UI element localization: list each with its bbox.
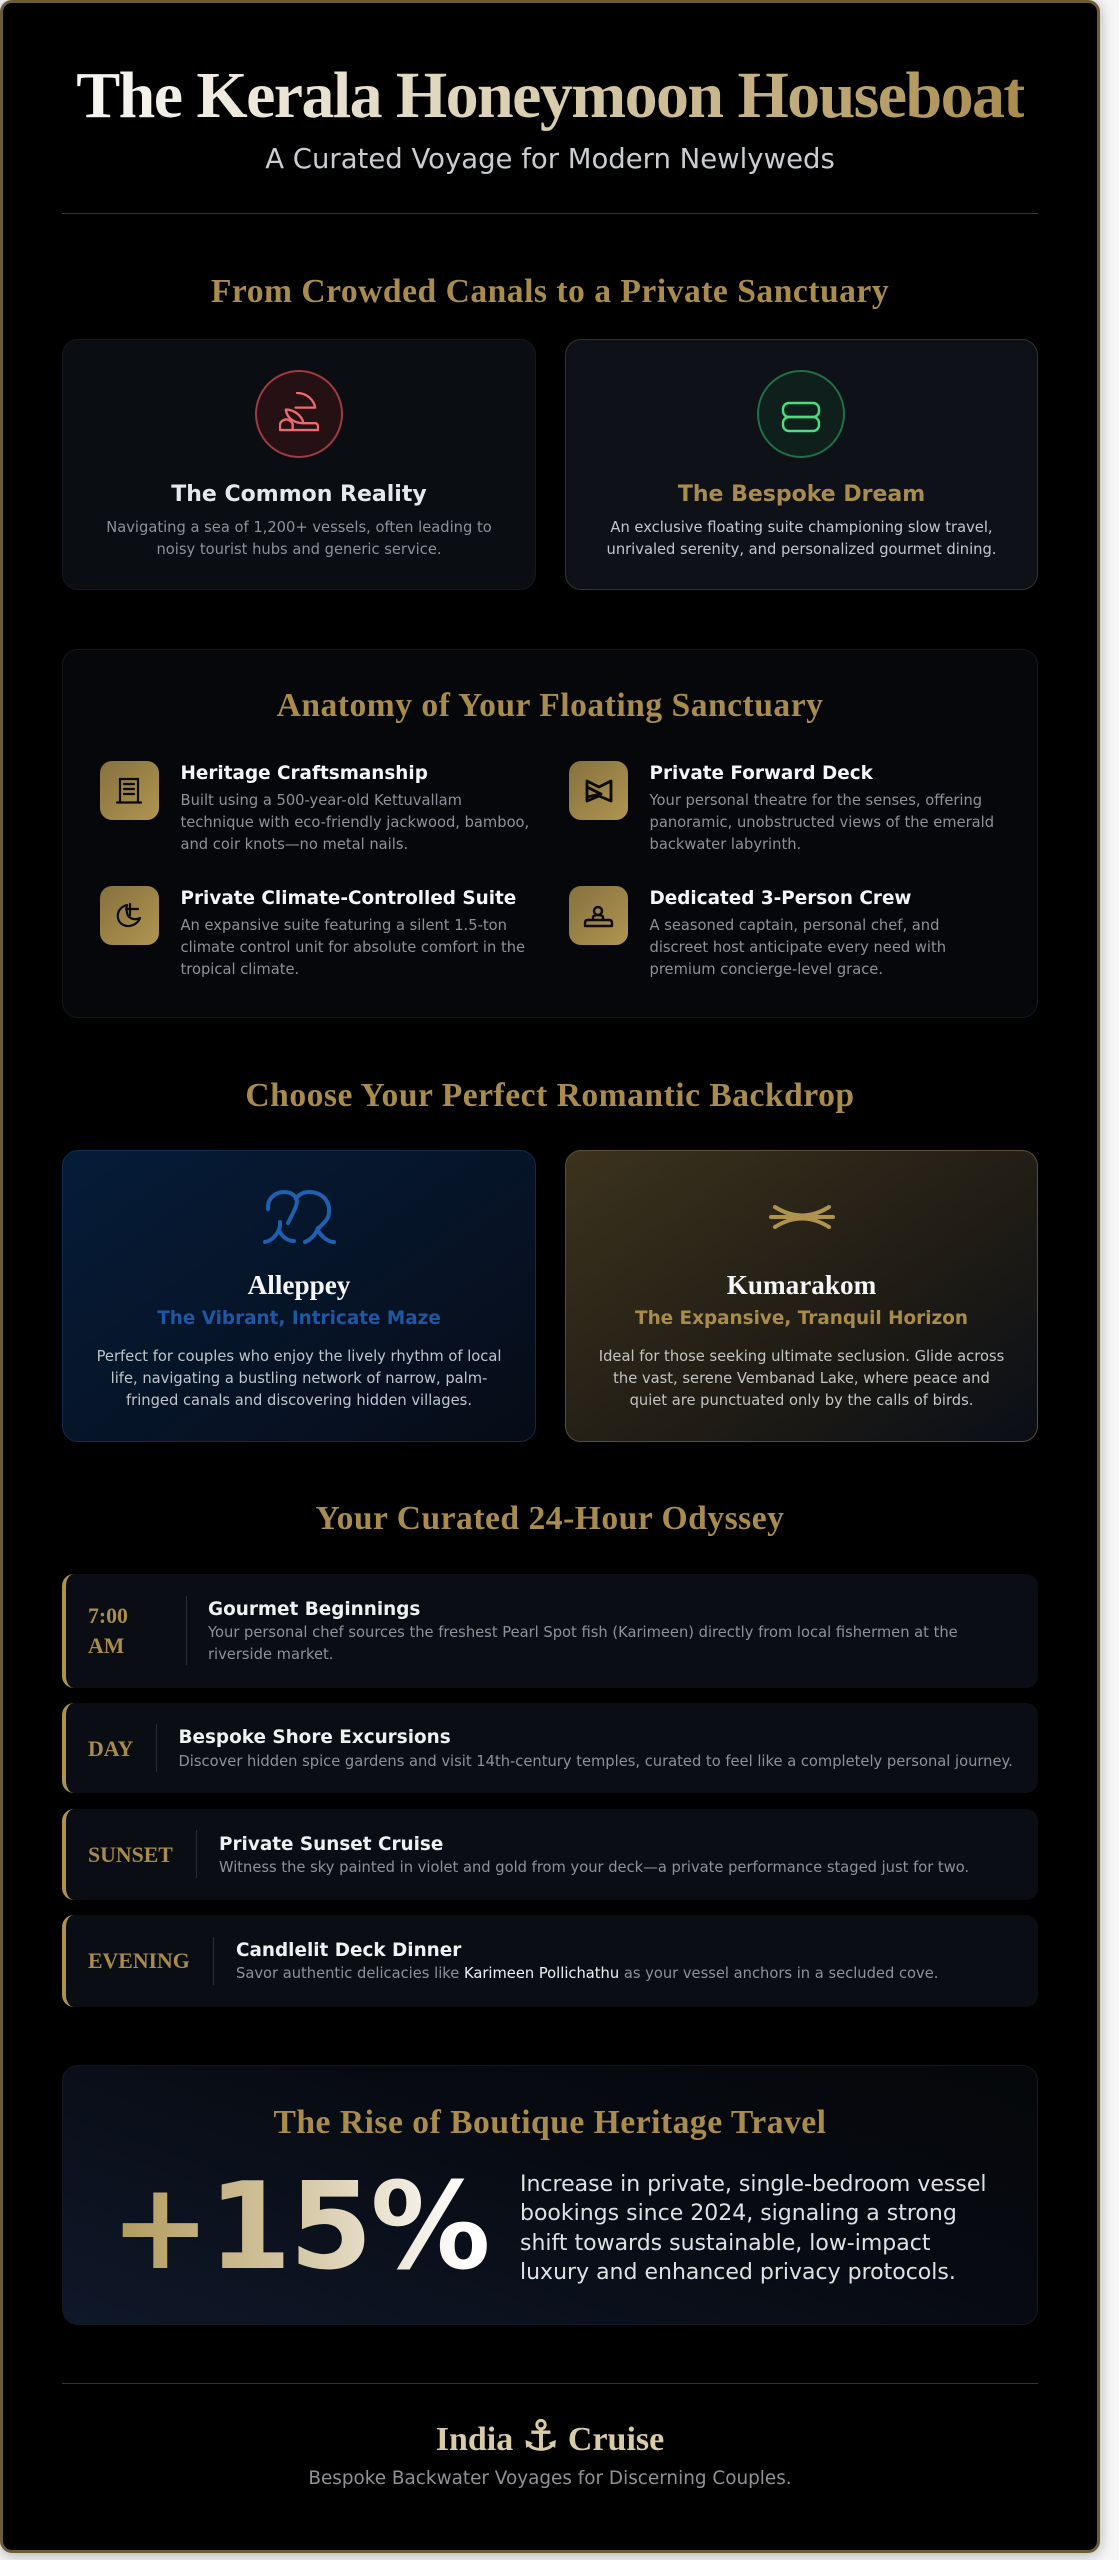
card text (106, 519, 492, 558)
panel: kumarakom (565, 1150, 1038, 1442)
heading: rise of boutique: The Rise of Boutique Heritage Travel (273, 2104, 827, 2141)
card text (599, 1348, 1004, 1409)
heading: 24-hour odyssey: Your Curated 24-Hour Odyssey (316, 1500, 784, 1537)
item title: Gourmet Beginnings (208, 1599, 420, 1620)
panel: anatomy of your floating sanctuary (62, 649, 1038, 1018)
card text: the vast, serene Vembanad Lake, where peace and (613, 1370, 990, 1387)
icon: winding canals (263, 1190, 336, 1244)
timeline item: 7:00 AM (62, 1574, 1038, 1688)
time label (88, 1604, 128, 1658)
item title: Private Sunset Cruise (219, 1834, 443, 1855)
card text: fringed canals and discovering hidden villages. (126, 1392, 472, 1409)
item text: riverside market. (208, 1646, 333, 1663)
icon: calm horizon (769, 1205, 835, 1229)
subtitle: A Curated Voyage for Modern Newlyweds (265, 143, 835, 175)
stat text: bookings since 2024, signaling a strong (520, 2201, 957, 2226)
stat: +15%: +15% (110, 2158, 488, 2297)
card tagline: The Vibrant, Intricate Maze (157, 1308, 441, 1329)
card text (97, 1348, 501, 1409)
card text (607, 519, 996, 558)
item text: Witness the sky painted in violet and gold from your deck—a private performance staged just for two. (219, 1859, 969, 1876)
item title: Bespoke Shore Excursions (178, 1727, 451, 1748)
feature text: panoramic, unobstructed views of the emerald (650, 814, 994, 831)
feature text: An expansive suite featuring a silent 1.5-ton (180, 917, 507, 934)
time label: DAY (88, 1737, 133, 1761)
footer tagline: Bespoke Backwater Voyages for Discerning Couples. (308, 2468, 792, 2489)
feature text: climate control unit for absolute comfort in the (180, 939, 525, 956)
feature text: backwater labyrinth. (650, 836, 801, 853)
card heading: The Bespoke Dream (678, 482, 925, 507)
card text: noisy tourist hubs and generic service. (156, 541, 442, 558)
feature title: Dedicated 3-Person Crew (650, 888, 911, 909)
feature text: tropical climate. (180, 961, 299, 978)
time label: SUNSET (88, 1843, 173, 1867)
panel: the common reality (62, 339, 536, 590)
feature text (650, 792, 994, 853)
icon: document (100, 761, 159, 820)
card text: life, navigating a bustling network of narrow, palm- (111, 1370, 487, 1387)
feature text: and coir knots—no metal nails. (180, 836, 408, 853)
timeline item: sunset (62, 1809, 1038, 1900)
stat text: luxury and enhanced privacy protocols. (520, 2260, 956, 2285)
stat text: shift towards sustainable, low-impact (520, 2231, 930, 2256)
feature title: Heritage Craftsmanship (180, 763, 428, 784)
feature: heritage craftsmanship (100, 761, 529, 853)
card text: Perfect for couples who enjoy the lively rhythm of local (97, 1348, 501, 1365)
panel: alleppey (62, 1150, 536, 1442)
card text: An exclusive floating suite championing slow travel, (610, 519, 993, 536)
icon: deck (569, 761, 628, 820)
timeline item: evening (62, 1915, 1038, 2007)
stat text (520, 2172, 986, 2285)
feature text (180, 917, 525, 978)
item text: Your personal chef sources the freshest Pearl Spot fish (Karimeen) directly from local fishermen at the (208, 1624, 958, 1641)
card name: Alleppey (248, 1270, 350, 1300)
heading: romantic backdrop: Choose Your Perfect Romantic Backdrop (245, 1077, 855, 1114)
feature: private forward deck (569, 761, 994, 853)
heading: anatomy: Anatomy of Your Floating Sanctuary (277, 687, 823, 724)
feature text: A seasoned captain, personal chef, and (650, 917, 939, 934)
card tagline: The Expansive, Tranquil Horizon (635, 1308, 968, 1329)
card text: quiet are punctuated only by the calls of birds. (630, 1392, 973, 1409)
timeline item: day (62, 1703, 1038, 1793)
feature title: Private Forward Deck (650, 763, 873, 784)
card text: unrivaled serenity, and personalized gourmet dining. (607, 541, 996, 558)
card text: Ideal for those seeking ultimate seclusion. Glide across (599, 1348, 1004, 1365)
item text: Savor authentic delicacies like Karimeen Pollichathu as your vessel anchors in a secluded cove. (236, 1965, 938, 1982)
icon: moon (100, 886, 159, 945)
item text: Discover hidden spice gardens and visit 14th-century temples, curated to feel like a completely personal journey. (178, 1753, 1013, 1770)
time label: AM (88, 1634, 124, 1658)
time label: EVENING (88, 1949, 190, 1973)
feature text: technique with eco-friendly jackwood, bamboo, (180, 814, 529, 831)
feature text (650, 917, 946, 978)
time label: 7:00 (88, 1604, 128, 1628)
feature text: premium concierge-level grace. (650, 961, 883, 978)
feature title: Private Climate-Controlled Suite (180, 888, 516, 909)
feature text (180, 792, 529, 853)
card text: Navigating a sea of 1,200+ vessels, often leading to (106, 519, 492, 536)
footer brand: India ⚓ Cruise (436, 2411, 664, 2460)
feature text: discreet host anticipate every need with (650, 939, 946, 956)
stat text: Increase in private, single-bedroom vessel (520, 2172, 986, 2197)
item text (208, 1624, 958, 1663)
icon: crew (569, 886, 628, 945)
feature text: Your personal theatre for the senses, offering (650, 792, 982, 809)
title: The Kerala Honeymoon Houseboat (76, 59, 1024, 132)
item title: Candlelit Deck Dinner (236, 1940, 461, 1961)
icon: private vessel (757, 370, 845, 458)
panel: boutique heritage travel (62, 2065, 1038, 2325)
card name: Kumarakom (727, 1270, 876, 1300)
card heading: The Common Reality (171, 482, 427, 507)
feature text: Built using a 500-year-old Kettuvallam (180, 792, 462, 809)
heading: from crowded canals: From Crowded Canals to a Private Sanctuary (211, 273, 889, 310)
panel: the bespoke dream (565, 339, 1038, 590)
feature: climate suite (100, 886, 525, 978)
icon: crowded boats (255, 370, 343, 458)
feature: dedicated crew (569, 886, 946, 978)
